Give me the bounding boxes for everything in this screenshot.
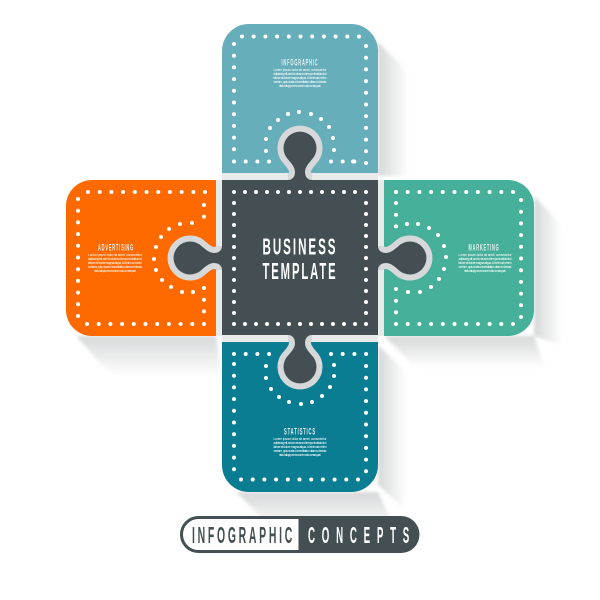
right piece body text: adipiscing elit, sed do eiusmod tempor incididunt ut — [458, 257, 512, 261]
top piece body text: adipiscing elit, sed do eiusmod tempor incididunt ut — [274, 72, 327, 76]
left piece body text — [88, 253, 143, 273]
left piece body text: nisi ut aliquip ex ea commodo consequat. — [94, 269, 136, 273]
bottom piece body text: nisi ut aliquip ex ea commodo consequat. — [279, 453, 321, 457]
right piece body text: labore et dolore magna aliqua. Ut enim ad minim — [458, 261, 512, 265]
top piece body text: nisi ut aliquip ex ea commodo consequat. — [279, 84, 321, 88]
top piece body text: Lorem ipsum dolor sit amet, consectetur — [274, 68, 327, 72]
top piece shape — [222, 24, 378, 173]
left piece body text: labore et dolore magna aliqua. Ut enim ad minim — [88, 261, 142, 265]
bottom piece body text — [274, 437, 327, 457]
bottom piece body text: veniam, quis nostrud exercitation ullamco laboris — [274, 449, 327, 453]
panel: central business template piece — [174, 132, 426, 383]
panel: advertising (left piece) — [66, 180, 216, 336]
badge: infographic concepts: INFOGRAPHIC — [192, 522, 295, 548]
left piece shape — [66, 180, 216, 336]
left piece dotted outline — [78, 192, 206, 324]
right piece body text: veniam, quis nostrud exercitation ullamco laboris — [458, 265, 512, 269]
badge: infographic concepts — [182, 516, 420, 553]
top piece body text: veniam, quis nostrud exercitation ullamco laboris — [274, 80, 327, 84]
panel: statistics (bottom piece) — [222, 342, 378, 492]
top piece body text — [274, 68, 327, 88]
text: CONCEPTS — [308, 522, 416, 548]
left piece body text: adipiscing elit, sed do eiusmod tempor incididunt ut — [88, 257, 142, 261]
bottom piece shape — [222, 342, 378, 492]
panel: infographic (top piece) — [222, 24, 378, 173]
knob halos — [174, 132, 426, 383]
bottom piece dotted outline — [234, 354, 368, 480]
long shadows behind the pieces — [76, 42, 562, 530]
badge left half — [182, 518, 300, 552]
left piece body text: Lorem ipsum dolor sit amet, consectetur — [88, 253, 143, 257]
right piece body text: Lorem ipsum dolor sit amet, consectetur — [458, 253, 512, 257]
right piece shape — [384, 180, 534, 336]
bottom piece body text: adipiscing elit, sed do eiusmod tempor incididunt ut — [274, 441, 327, 445]
top piece body text: labore et dolore magna aliqua. Ut enim ad minim — [274, 76, 327, 80]
badge right half — [300, 516, 420, 553]
panel: statistics (bottom piece): STATISTICS — [284, 426, 316, 438]
panel: marketing (right piece) — [384, 180, 534, 336]
panel: infographic (top piece): INFOGRAPHIC — [282, 58, 318, 68]
right piece body text — [458, 253, 512, 273]
right piece body text: nisi ut aliquip ex ea commodo consequat. — [464, 269, 506, 273]
panel: central business template piece: TEMPLATE — [262, 258, 338, 284]
panel: marketing (right piece): MARKETING — [468, 242, 500, 254]
light gaps between the pieces — [216, 173, 384, 342]
central piece shape with four knobs — [174, 132, 426, 383]
central piece dotted square — [234, 192, 366, 324]
central title — [262, 234, 338, 284]
bottom piece body text: Lorem ipsum dolor sit amet, consectetur — [274, 437, 327, 441]
top piece dotted outline — [234, 36, 366, 170]
bottom piece body text: labore et dolore magna aliqua. Ut enim ad minim — [274, 445, 327, 449]
left piece body text: veniam, quis nostrud exercitation ullamco laboris — [88, 265, 142, 269]
panel: advertising (left piece): ADVERTISING — [98, 242, 134, 254]
right piece dotted outline — [396, 192, 521, 324]
panel: central business template piece: BUSINESS — [262, 234, 338, 260]
